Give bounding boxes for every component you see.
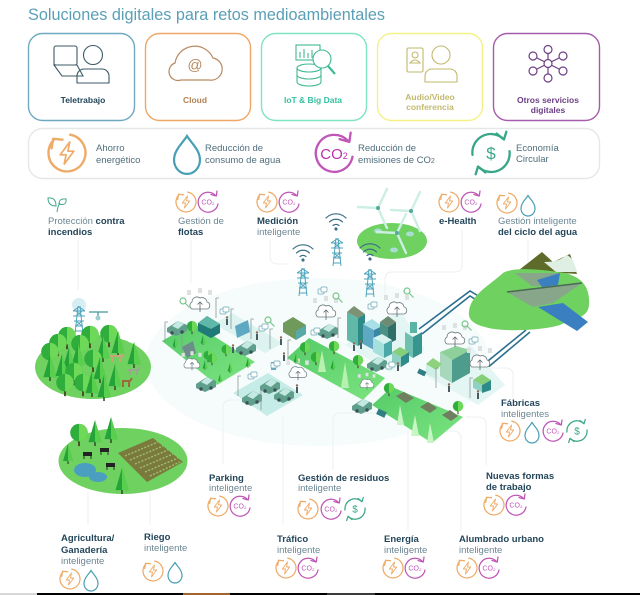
legend: reduccion de CO2: Reducción de [358,143,416,154]
illustration: protección contra incendios forest [35,298,151,401]
label: medición inteligente: CO₂ [282,200,296,206]
illustration: cloud connectivity icons [180,287,492,379]
label: e-Health [439,191,481,227]
city ground [146,278,490,446]
label: fábricas inteligentes [500,398,587,443]
illustration: green park centre [286,338,385,400]
illustration: street lights park [372,383,463,443]
label: alumbrado urbano inteligente: inteligente [459,545,502,556]
illustration: pale teal strip [214,313,283,353]
card: Cloud [146,34,250,120]
label: riego inteligente: inteligente [144,543,187,554]
label: energía inteligente [383,534,427,578]
label: tráfico inteligente: Tráfico [277,534,308,545]
card: Teletrabajo: Teletrabajo [61,95,105,105]
legend: reduccion de agua: Reducción de [205,143,263,154]
label: agricultura ganadería inteligente: inteligente [61,556,104,567]
label: fábricas inteligentes: CO₂ [546,428,560,436]
label: parking inteligente: CO₂ [233,504,247,510]
icon: cloud with at sign: @ [187,57,203,74]
illustration: factories platform [417,345,505,405]
label: gestión de flotas [176,191,224,238]
illustration: buildings platform [338,306,425,372]
label: energía inteligente: inteligente [384,545,427,556]
title: Soluciones digitales para retos medioambientales [28,5,385,24]
label: gestión de residuos inteligente: inteligente [298,483,341,494]
panel: benefits legend [28,128,600,178]
label: gestión de residuos inteligente: CO₂ [324,506,338,514]
illustration: dam and reservoir [469,252,589,331]
label: protección contra incendios: Protección contra [48,216,125,227]
label: gestión de flotas: CO₂ [201,200,215,206]
legend: ahorro energetico [48,135,140,171]
icon: database and magnifier [296,45,335,86]
icon: laptop and person [54,46,109,83]
legend: reduccion de agua [174,136,281,174]
label: gestión de residuos inteligente [298,473,389,520]
illustration: green park left [162,321,255,385]
illustration: parking platform [233,362,303,416]
label: agricultura ganadería inteligente [60,533,115,591]
label: parking inteligente [208,473,252,516]
label: alumbrado urbano inteligente [457,534,544,578]
label: gestión inteligente del ciclo del agua: Gestión inteligente [498,216,577,227]
label: protección contra incendios [48,198,125,238]
legend: ahorro energetico: energético [96,155,140,166]
label: medición inteligente: Medición [257,216,298,227]
card: Audio/Video conferencia: conferencia [406,102,454,112]
bottom strip [0,593,640,595]
legend: reduccion de CO2 [316,133,435,172]
label: parking inteligente: inteligente [209,483,252,494]
label: nuevas formas de trabajo: CO₂ [509,502,523,510]
label: alumbrado urbano inteligente: Alumbrado urbano [459,534,544,545]
card: Otros servicios digitales: Otros servicios [517,95,579,105]
label: medición inteligente: inteligente [257,227,300,238]
label: alumbrado urbano inteligente: CO₂ [482,566,496,572]
card: IoT and Big Data: IoT & Big Data [284,95,342,105]
label: gestión de flotas: flotas [178,227,203,238]
label: fábricas inteligentes: inteligentes [501,409,549,420]
label: nuevas formas de trabajo: Nuevas formas [486,471,554,482]
icon: network [529,46,567,82]
label: medición inteligente [257,191,300,238]
label: tráfico inteligente: CO₂ [301,566,315,572]
icon: sprout [48,198,66,212]
legend: ahorro energetico: Ahorro [96,143,125,154]
illustration: wind farm [357,189,427,259]
label: gestión de residuos inteligente: $ [352,504,358,516]
label: gestión inteligente del ciclo del agua: del ciclo del agua [498,227,578,238]
label: fábricas inteligentes: Fábricas [501,398,540,409]
legend: reduccion de CO2: CO2 [320,146,348,163]
legend: reduccion de agua: consumo de agua [205,155,281,166]
card: Otros servicios digitales: digitales [531,105,566,115]
legend: economia circular: Circular [516,154,549,165]
card: Audio/Video conferencia: Audio/Video [405,92,455,102]
leader lines [78,230,528,530]
label: e-Health: e-Health [439,216,477,227]
card: IoT and Big Data [262,34,366,120]
legend: economia circular: Economía [516,143,559,154]
label: gestión inteligente del ciclo del agua [497,193,578,238]
label: parking inteligente: Parking [209,473,244,484]
icon: video call [407,46,457,82]
label: e-Health: CO₂ [464,200,478,206]
label: nuevas formas de trabajo: de trabajo [486,482,532,493]
card: Otros servicios digitales [494,34,600,120]
label: riego inteligente: Riego [144,532,171,543]
illustration: vehicles and street elements [167,298,372,414]
label: protección contra incendios: incendios [48,227,92,238]
label: tráfico inteligente: inteligente [277,545,320,556]
legend: economia circular [472,132,559,174]
card: Audio/Video conferencia [378,34,482,120]
label: agricultura ganadería inteligente: Ganadería [61,545,108,556]
card: Cloud: Cloud [183,95,207,105]
illustration: agricultura farm [58,417,188,494]
illustration: pipes [419,291,530,369]
label: energía inteligente: CO₂ [408,566,422,572]
label: fábricas inteligentes: $ [574,426,580,438]
label: energía inteligente: Energía [384,534,420,545]
label: agricultura ganadería inteligente: Agricultura/ [61,533,115,544]
label: nuevas formas de trabajo [484,471,554,515]
card: Teletrabajo [28,34,134,120]
legend: economia circular: $ [486,144,496,163]
label: gestión de residuos inteligente: Gestión de residuos [298,473,389,484]
illustration: wifi pylons [293,214,380,297]
legend: reduccion de CO2: emisiones de CO2 [358,155,435,166]
label: tráfico inteligente [276,534,320,578]
panel: digital services cards [28,34,600,120]
label: gestión de flotas: Gestión de [178,216,224,227]
label: riego inteligente [143,532,187,583]
